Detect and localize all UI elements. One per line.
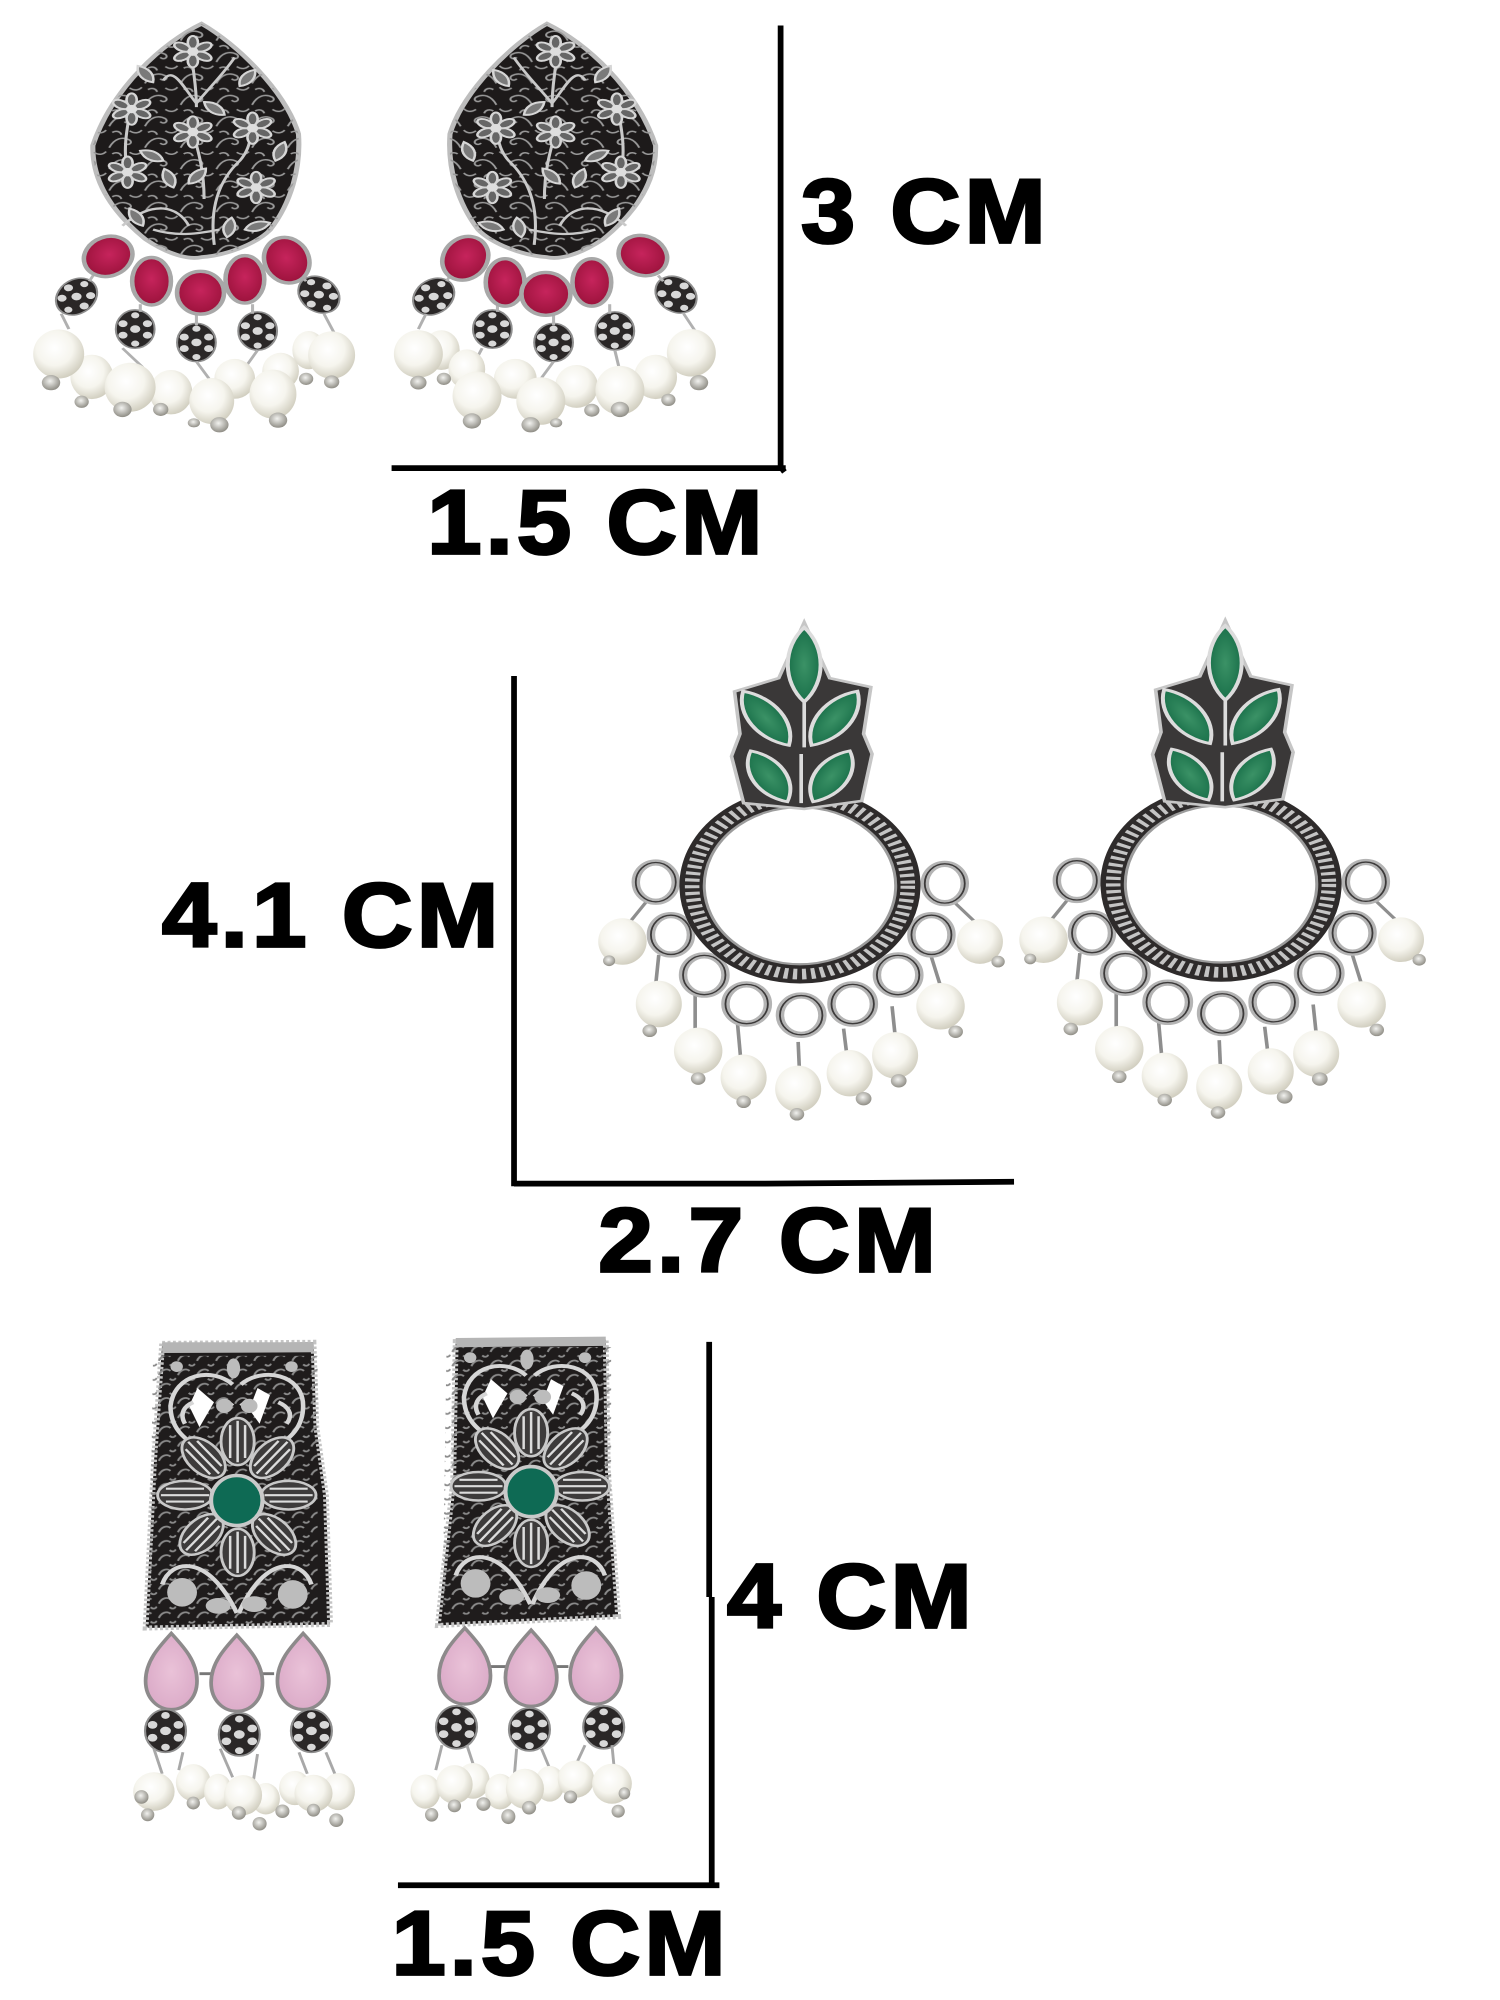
- label: 3 CM height: 3 CM: [801, 161, 1050, 262]
- label: 2.7 CM width: 2.7 CM: [598, 1191, 940, 1292]
- left rectangular earring: [133, 1342, 355, 1831]
- dimension lines: set 1: [392, 26, 786, 472]
- label: 4 CM height: 4 CM: [727, 1547, 976, 1648]
- left red earring: [33, 19, 355, 432]
- right green earring: [1019, 621, 1426, 1119]
- left green earring: [598, 622, 1005, 1121]
- dimension lines: set 2: [514, 676, 1014, 1186]
- label: 4.1 CM height: 4.1 CM: [162, 865, 503, 966]
- earring set 1: red stone leaf earrings: [33, 19, 716, 432]
- right rectangular earring: [410, 1337, 632, 1824]
- earring set 2: green leaf chandbali earrings: [598, 621, 1426, 1121]
- dimension lines: set 3: [398, 1342, 719, 1888]
- earring set 3: rectangular earrings with pink drops: [133, 1337, 632, 1831]
- label: 1.5 CM width: 1.5 CM: [427, 473, 767, 574]
- right red earring: [394, 19, 716, 432]
- label: 1.5 CM width bottom: 1.5 CM: [392, 1893, 730, 1994]
